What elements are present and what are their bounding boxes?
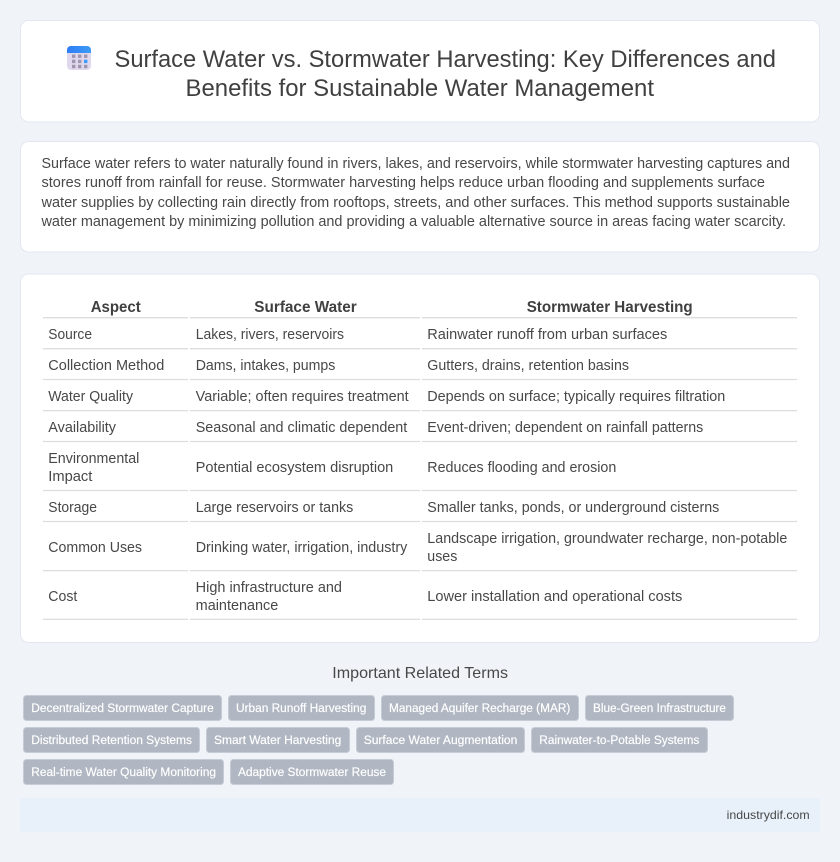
row: storage: Storage [48, 500, 97, 516]
tag: rainwater-to-potable systems: Rainwater-to-Potable Systems [539, 733, 699, 747]
panel: comparison table [20, 274, 820, 642]
tag: decentralized stormwater capture [24, 696, 222, 720]
text block: introduction paragraph: water supplies by collecting rain directly from rooftops, streets, and other surfaces. This method supports sustainable [40, 195, 790, 211]
tag: urban runoff harvesting: Urban Runoff Harvesting [236, 701, 366, 715]
tag: surface water augmentation: Surface Water Augmentation [364, 733, 517, 747]
tag: blue-green infrastructure: Blue-Green Infrastructure [593, 701, 726, 715]
row: cost: Cost [48, 589, 77, 605]
row: storage [48, 500, 719, 516]
table header row [91, 299, 693, 316]
tag: real-time water quality monitoring: Real-time Water Quality Monitoring [31, 765, 216, 779]
title [114, 46, 776, 102]
tag: real-time water quality monitoring [24, 760, 224, 784]
footer bar [20, 798, 820, 832]
table header row: Aspect [91, 299, 141, 316]
row: source: Source [48, 327, 92, 343]
tag: decentralized stormwater capture: Decentralized Stormwater Capture [31, 701, 214, 715]
panel: introduction [20, 142, 820, 252]
row: collection method: Dams, intakes, pumps [196, 358, 335, 374]
row: water quality: Depends on surface; typically requires filtration [427, 389, 725, 405]
footer source text: industrydif.com [727, 808, 810, 822]
tag: smart water harvesting: Smart Water Harvesting [214, 733, 341, 747]
row: source: Rainwater runoff from urban surfaces [427, 327, 667, 343]
tag: rainwater-to-potable systems [532, 728, 708, 752]
row: cost: High infrastructure and [196, 580, 342, 596]
row: common uses: Drinking water, irrigation, industry [196, 540, 408, 556]
text block: introduction paragraph: water management by minimizing pollution and providing a valuable alternative source in areas facing water scarcity. [40, 214, 786, 230]
row: environmental impact: Impact [48, 469, 92, 485]
row: collection method: Gutters, drains, retention basins [427, 358, 629, 374]
tag: urban runoff harvesting [228, 696, 374, 720]
row: collection method [48, 358, 629, 374]
row: source [48, 327, 667, 343]
row: availability: Event-driven; dependent on rainfall patterns [427, 420, 703, 436]
row: cost: Lower installation and operational costs [427, 589, 682, 605]
row: environmental impact: Potential ecosystem disruption [196, 460, 393, 476]
tag: distributed retention systems: Distributed Retention Systems [31, 733, 192, 747]
table header row: Stormwater Harvesting [527, 299, 693, 316]
tag: adaptive stormwater reuse [230, 760, 394, 784]
row: common uses: uses [427, 549, 457, 565]
tag: managed aquifer recharge [382, 696, 578, 720]
tag: smart water harvesting [206, 728, 350, 752]
tag: managed aquifer recharge: Managed Aquifer Recharge (MAR) [389, 701, 570, 715]
row: storage: Smaller tanks, ponds, or underground cisterns [427, 500, 719, 516]
tag: adaptive stormwater reuse: Adaptive Stormwater Reuse [238, 765, 386, 779]
row: water quality: Variable; often requires treatment [196, 389, 409, 405]
row: storage: Large reservoirs or tanks [196, 500, 353, 516]
text block: introduction paragraph: Surface water refers to water naturally found in rivers, lakes, and reservoirs, while stormwater harvesting captures and [42, 156, 790, 172]
panel: header [20, 20, 820, 122]
table header row: Surface Water [254, 299, 357, 316]
row: common uses: Common Uses [48, 540, 142, 556]
row: common uses [48, 531, 787, 565]
row: availability [48, 420, 703, 436]
text block: introduction paragraph: stores runoff from rainfall for reuse. Stormwater harvesting helps reduce urban flooding and supplements surface [42, 175, 765, 191]
title: Surface Water vs. Stormwater Harvesting: Key Differences and [114, 46, 776, 73]
tag: distributed retention systems [24, 728, 200, 752]
tag: blue-green infrastructure [586, 696, 734, 720]
tag: surface water augmentation [356, 728, 524, 752]
row: availability: Seasonal and climatic dependent [196, 420, 407, 436]
row: collection method: Collection Method [48, 358, 164, 374]
row: cost: maintenance [196, 598, 278, 614]
row: water quality [48, 389, 725, 405]
row: cost [48, 580, 682, 614]
row: environmental impact: Reduces flooding and erosion [427, 460, 616, 476]
row: water quality: Water Quality [48, 389, 134, 405]
title: Benefits for Sustainable Water Management [186, 75, 654, 102]
heading: important related terms: Important Related Terms [332, 665, 508, 682]
tag list: related terms [24, 696, 734, 784]
row: environmental impact [48, 451, 616, 485]
row: environmental impact: Environmental [48, 451, 139, 467]
row: availability: Availability [48, 420, 117, 436]
row: common uses: Landscape irrigation, groundwater recharge, non-potable [427, 531, 787, 547]
icon: calendar [67, 46, 91, 70]
row: source: Lakes, rivers, reservoirs [196, 327, 344, 343]
text block: introduction paragraph [40, 156, 790, 230]
